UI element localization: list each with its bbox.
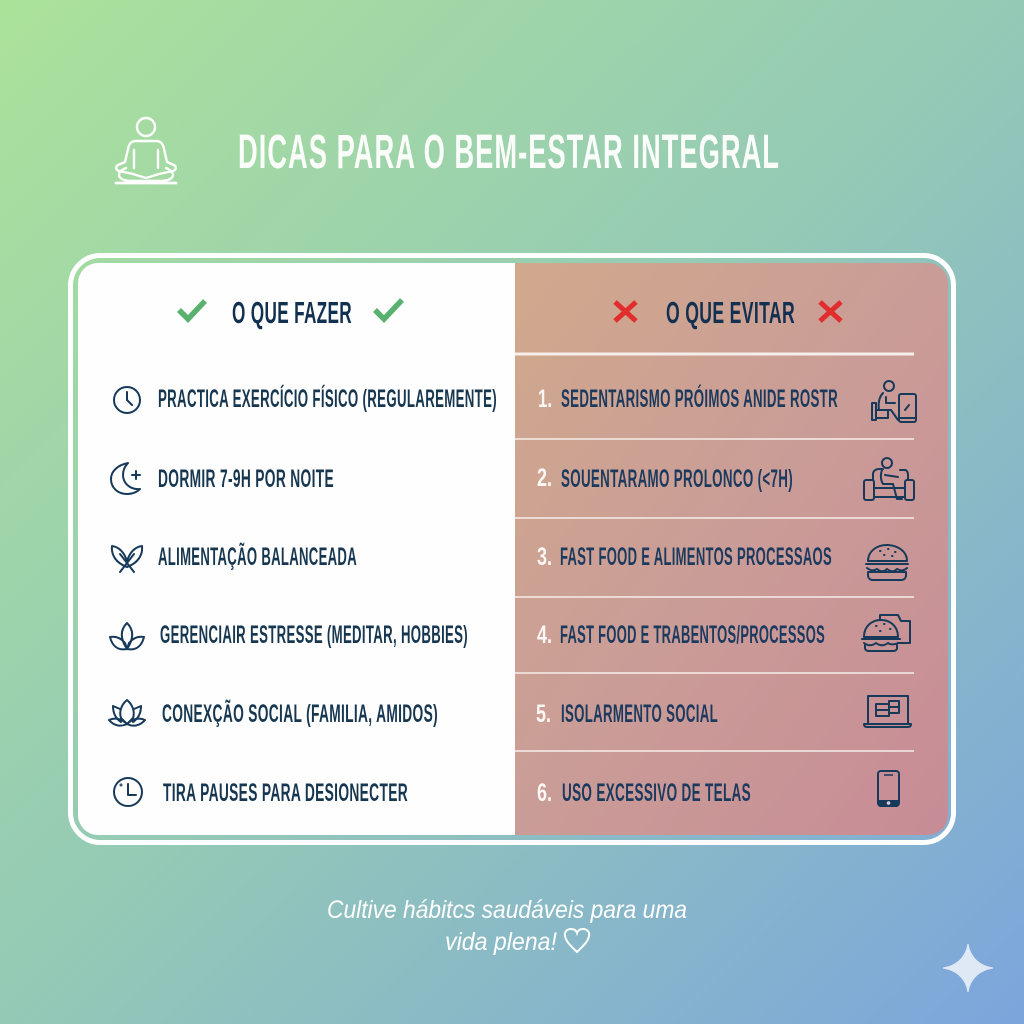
item 2: SOUENTARAMO PROLONCO (<7H) xyxy=(561,465,793,493)
icon: person with phone xyxy=(872,381,916,422)
number 1: 1. xyxy=(538,385,552,413)
icon: person on sofa xyxy=(864,458,914,500)
icon: sparkle xyxy=(943,944,993,992)
panel: o que evitar xyxy=(515,263,948,835)
number 3: 3. xyxy=(537,543,552,571)
icon: sprout xyxy=(110,623,144,649)
icon: check right xyxy=(375,300,402,319)
icon: cross right xyxy=(820,302,841,321)
panel: o que fazer xyxy=(78,263,515,835)
item 5: CONEXÇÃO SOCIAL (FAMILIA, AMIDOS) xyxy=(162,698,438,728)
icon: clock xyxy=(114,778,142,806)
icon: leaves xyxy=(112,546,142,572)
icon: lotus xyxy=(109,700,145,726)
icon: check left xyxy=(179,301,205,319)
icon: clock xyxy=(114,387,140,413)
icon: burger and folder xyxy=(862,615,910,651)
footer text: Cultive hábitcs saudáveis para uma xyxy=(327,896,687,924)
item 2: DORMIR 7-9H POR NOITE xyxy=(158,465,334,493)
icon: moon xyxy=(111,463,140,494)
number 2: 2. xyxy=(537,464,552,492)
icon: heart xyxy=(565,929,589,952)
item 1: PRACTICA EXERCÍCIO FÍSICO (REGULAREMENTE) xyxy=(158,384,497,413)
heading: o que evitar: O QUE EVITAR xyxy=(666,295,795,330)
footer text: vida plena! xyxy=(445,928,557,956)
number 5: 5. xyxy=(536,700,551,728)
dividers xyxy=(515,354,914,751)
item 3: ALIMENTAÇÃO BALANCEADA xyxy=(158,541,357,571)
outer frame xyxy=(70,256,954,842)
icon: burger xyxy=(866,545,908,580)
item 4: GERENCIAIR ESTRESSE (MEDITAR, HOBBIES) xyxy=(160,621,468,649)
icon: phone xyxy=(878,771,899,807)
number 4: 4. xyxy=(537,621,552,649)
item 6: TIRA PAUSES PARA DESIONECTER xyxy=(163,779,408,807)
number 6: 6. xyxy=(537,779,552,807)
item 6: USO EXCESSIVO DE TELAS xyxy=(562,779,751,807)
heading: o que fazer: O QUE FAZER xyxy=(232,295,352,330)
icon: laptop xyxy=(864,696,911,727)
footer text xyxy=(327,896,687,956)
icon: meditating person xyxy=(116,118,176,183)
item 5: ISOLARMENTO SOCIAL xyxy=(561,700,718,728)
icon: cross left xyxy=(615,302,636,321)
